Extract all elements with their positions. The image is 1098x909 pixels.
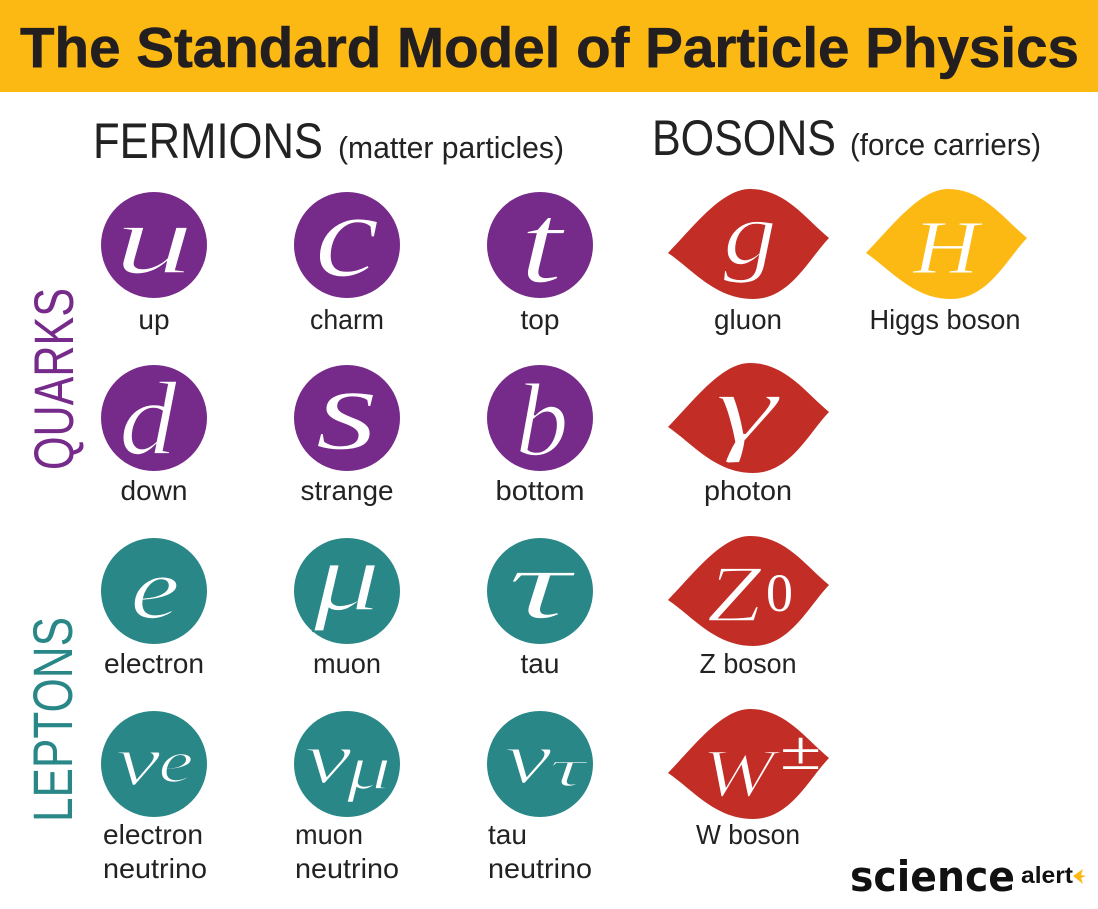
particle: photon: γ xyxy=(715,353,781,464)
logo: sciencealert: science xyxy=(850,852,1015,901)
particle: Higgs boson: H xyxy=(912,206,984,290)
particle: Higgs boson xyxy=(866,189,1027,335)
particle: tau neutrino: tau xyxy=(488,819,527,850)
particle: muon neutrino: μ xyxy=(345,732,391,803)
particle: muon neutrino: ν xyxy=(305,717,352,799)
particle: up quark: up xyxy=(138,304,170,335)
particle: strange quark: s xyxy=(315,343,379,476)
particle: charm quark: c xyxy=(315,168,379,303)
heading: bosons: BOSONS xyxy=(652,110,836,166)
particle: electron neutrino: electron xyxy=(103,819,203,850)
particle: W boson: W boson xyxy=(696,819,800,850)
particle: muon neutrino: muon xyxy=(295,819,363,850)
particle: W boson: W xyxy=(702,735,781,811)
title banner: The Standard Model of Particle Physics xyxy=(20,16,1079,80)
particle: W boson: ± xyxy=(780,721,821,782)
heading: bosons: (force carriers) xyxy=(850,127,1041,162)
particle: tau xyxy=(487,529,593,679)
particle: tau: τ xyxy=(507,529,577,640)
particle: charm quark xyxy=(294,168,400,335)
particle: electron neutrino: neutrino xyxy=(103,853,207,884)
particle: Higgs boson: Higgs boson xyxy=(870,304,1020,335)
particle: up quark: u xyxy=(114,184,194,295)
heading: fermions: (matter particles) xyxy=(338,130,564,165)
particle: Z boson: 0 xyxy=(766,563,793,623)
particle: muon xyxy=(294,522,400,679)
particle: muon: μ xyxy=(312,522,381,632)
particle: charm quark: charm xyxy=(310,304,384,335)
particle: bottom quark xyxy=(487,362,593,506)
particle: muon neutrino xyxy=(294,711,400,884)
particle: tau neutrino xyxy=(487,711,593,884)
particle: bottom quark: bottom xyxy=(496,475,584,506)
particle: muon: muon xyxy=(313,648,381,679)
particle: Z boson: Z xyxy=(707,550,762,639)
particle: strange quark xyxy=(294,343,400,506)
particle: Z boson xyxy=(668,536,829,679)
particle: electron neutrino: ν xyxy=(116,721,161,801)
particle: electron xyxy=(101,538,207,679)
particle: top quark: top xyxy=(521,304,559,335)
particle: photon: photon xyxy=(704,475,792,506)
heading: fermions: FERMIONS xyxy=(93,113,323,169)
particle: top quark xyxy=(487,179,593,335)
particle: electron neutrino xyxy=(101,711,207,884)
particle: Z boson: Z boson xyxy=(700,648,796,679)
particle: electron: e xyxy=(130,539,180,637)
heading: fermions xyxy=(93,113,564,169)
particle: gluon: g xyxy=(723,183,777,284)
particle: bottom quark: b xyxy=(515,362,569,478)
title banner xyxy=(0,0,1098,92)
particle: tau neutrino: ν xyxy=(505,717,552,799)
particle: up quark xyxy=(101,184,207,335)
particle: electron neutrino: e xyxy=(158,729,194,796)
particle: top quark: t xyxy=(519,179,566,307)
particle: tau: tau xyxy=(521,648,559,679)
particle: gluon: gluon xyxy=(714,304,782,335)
side label: leptons: LEPTONS xyxy=(21,617,84,822)
particle: tau neutrino: τ xyxy=(549,739,589,798)
particle: down quark xyxy=(101,361,207,506)
particle: tau neutrino: neutrino xyxy=(488,853,592,884)
heading: bosons xyxy=(652,110,1041,166)
particle: down quark: down xyxy=(121,475,187,506)
particle: gluon xyxy=(668,183,829,335)
particle: down quark: d xyxy=(119,361,178,477)
particle: strange quark: strange xyxy=(300,475,394,506)
particle: photon xyxy=(668,353,829,506)
particle: electron: electron xyxy=(104,648,204,679)
particle: muon neutrino: neutrino xyxy=(295,853,399,884)
particle: W boson xyxy=(668,709,829,850)
side label: quarks: QUARKS xyxy=(22,288,85,470)
logo: sciencealert: alert xyxy=(1021,862,1073,888)
